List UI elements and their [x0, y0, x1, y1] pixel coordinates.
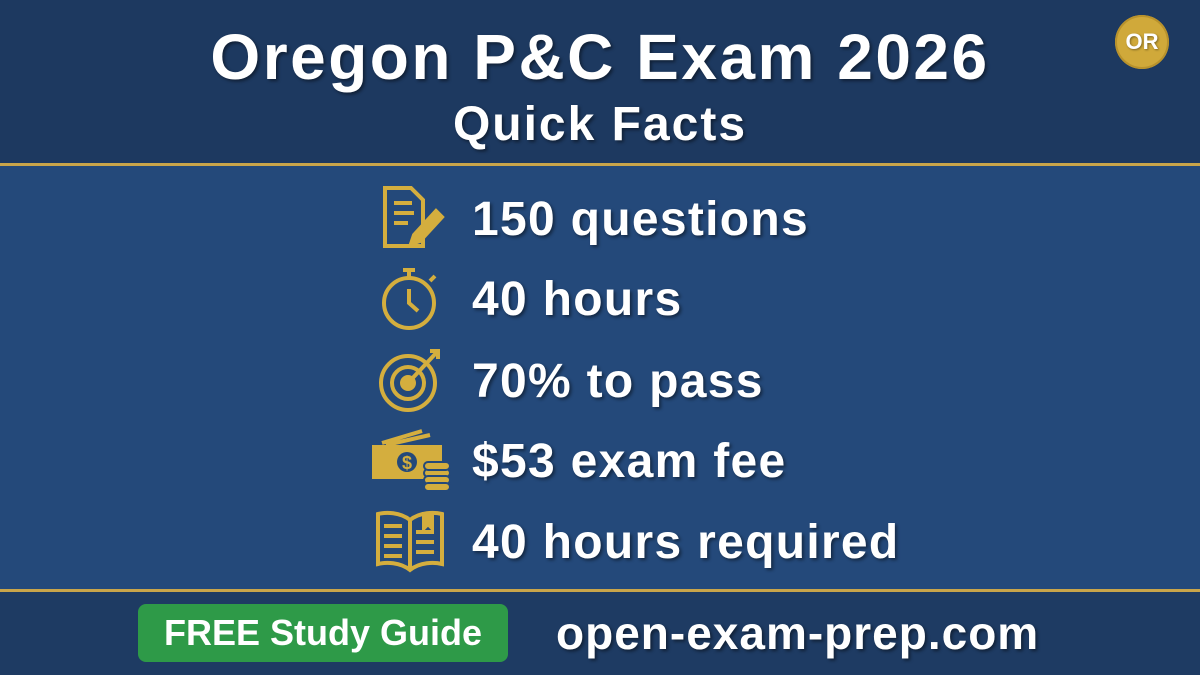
fact: required [376, 510, 900, 572]
fact: questions [383, 186, 810, 248]
button: free study guide: FREE Study Guide [164, 612, 482, 653]
fact: time: 40 hours [472, 273, 682, 326]
fact: pass [379, 349, 764, 412]
subtitle: Quick Facts [453, 98, 747, 151]
icon: stopwatch [382, 268, 436, 330]
icon: money [372, 429, 449, 490]
title: Oregon P&C Exam 2026 [210, 21, 990, 93]
icon: document pencil [383, 186, 445, 248]
icon: target [379, 349, 440, 412]
fact: time [382, 268, 683, 330]
fact: required: 40 hours required [472, 516, 900, 569]
badge: OR: OR [1126, 29, 1158, 54]
badge: OR [1115, 15, 1169, 69]
fact: pass: 70% to pass [472, 355, 764, 408]
url: open-exam-prep.com [556, 607, 1039, 659]
button: free study guide [138, 604, 508, 662]
icon: money: $ [402, 453, 412, 473]
fact: fee [372, 429, 787, 490]
header band [0, 0, 1200, 164]
footer band [0, 592, 1200, 675]
fact: fee: $53 exam fee [472, 435, 786, 488]
icon: open book [376, 510, 444, 572]
fact: questions: 150 questions [472, 193, 809, 246]
